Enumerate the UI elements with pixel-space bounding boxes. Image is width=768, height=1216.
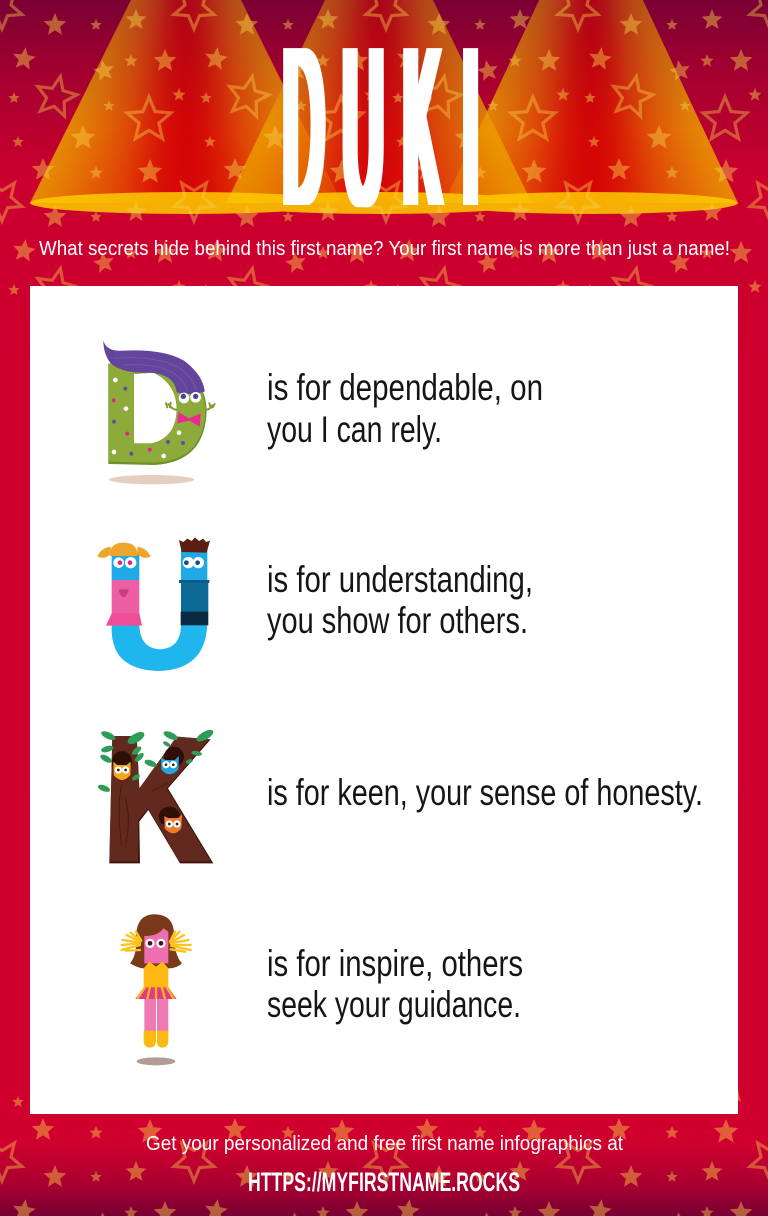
- footer text: Get your personalized and free first name infographics at: [146, 1132, 623, 1155]
- shadow: [137, 1057, 175, 1065]
- spotlight pools: [30, 192, 738, 214]
- icon: letter D character: [103, 341, 215, 484]
- spotlight left: [0, 0, 386, 203]
- icon: letter U character: [97, 537, 210, 671]
- shadow: [109, 475, 194, 484]
- subtitle: What secrets hide behind this first name? Your first name is more than just a name!: [39, 238, 730, 260]
- text: D line 1: is for dependable, on: [267, 367, 543, 408]
- text: U line 1: is for understanding,: [267, 559, 533, 600]
- footer url: HTTPS://MYFIRSTNAME.ROCKS: [248, 1167, 520, 1197]
- star pattern top: [0, 0, 768, 300]
- text: I line 1: is for inspire, others: [267, 943, 523, 984]
- icon: letter I cheerleader: [122, 914, 191, 1065]
- text: D line 2: you I can rely.: [267, 409, 442, 450]
- text: U line 2: you show for others.: [267, 600, 528, 641]
- spotlight middle: [183, 0, 575, 203]
- spotlight right: [403, 0, 768, 203]
- spotlights: [0, 0, 768, 214]
- panel: letters: [30, 286, 738, 1114]
- text: I line 2: seek your guidance.: [267, 984, 521, 1025]
- icon: letter K tree with owls: [97, 728, 215, 863]
- star pattern bottom: [0, 1090, 768, 1216]
- title: DUKI: [284, 0, 478, 254]
